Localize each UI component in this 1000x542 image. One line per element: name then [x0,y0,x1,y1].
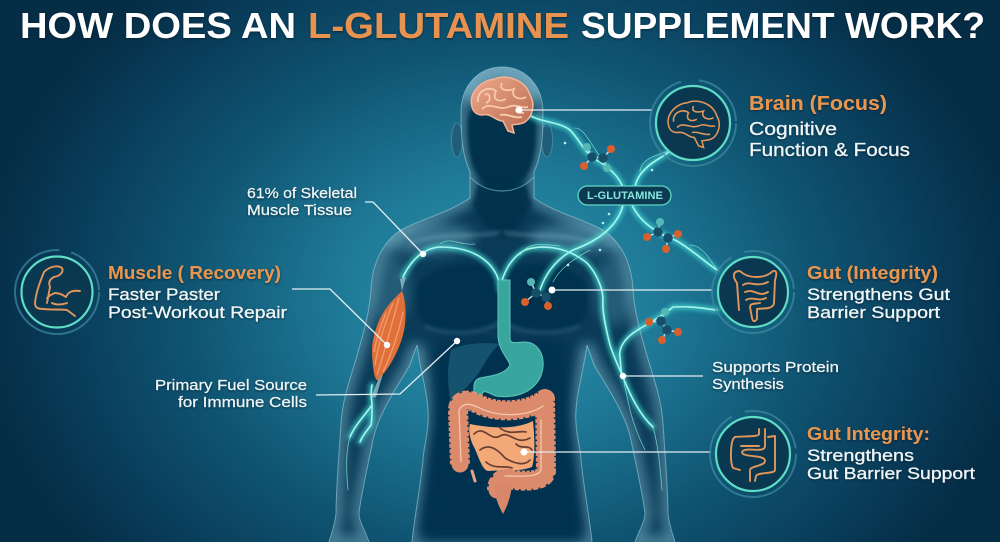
text: gut integrity [807,424,975,483]
brain organ [471,77,533,133]
panel: muscle recovery [15,250,287,334]
text: muscle: Post-Workout Repair [108,303,287,322]
callout: immune fuel: Primary Fuel Source [155,378,307,394]
icon: flexed arm [15,250,99,334]
callout: protein synthesis: Synthesis [712,377,784,393]
glowing neural pathways [347,115,717,490]
panel: gut integrity upper [712,251,950,333]
molecules [521,143,682,344]
text: gut [807,263,950,322]
panel: gut integrity lower [710,411,975,497]
icon: gut [712,251,794,333]
text: gut integrity: Strengthens [807,446,914,465]
leader lines and dots [292,106,712,456]
title [20,5,985,46]
callout: protein synthesis: Supports Protein [712,360,839,376]
text: brain: Cognitive [749,119,837,139]
text: muscle: Faster Paster [108,285,220,304]
text: gut: Barrier Support [807,303,940,322]
icon: brain [650,80,736,166]
head and neck shadow [466,109,538,184]
callout: immune fuel: for Immune Cells [178,395,307,411]
chest and abdomen shadow [416,264,500,332]
title: SUPPLEMENT WORK? [581,5,985,46]
molecule: chest [521,278,552,310]
small intestine [469,421,534,471]
icon: intestine [710,411,796,497]
text: muscle: Muscle ( Recovery) [108,263,281,283]
text: brain: Function & Focus [749,140,910,160]
text: gut: Strengthens Gut [807,285,950,304]
title: HOW DOES AN [20,5,296,46]
muscle organ [371,277,406,398]
molecule: upper left of pill [580,143,615,172]
text: muscle [108,263,287,322]
liver [448,343,500,403]
text: brain [749,93,910,160]
callout: immune fuel [155,378,307,411]
title: L-GLUTAMINE [308,5,569,46]
callout: skeletal muscle [247,186,357,219]
text: gut integrity: Gut Barrier Support [807,464,975,483]
molecule: below pill [643,218,682,253]
text: brain: Brain (Focus) [749,93,887,115]
large intestine [458,399,546,514]
panel: brain focus [650,80,910,166]
L-glutamine pill label [578,186,671,205]
text: gut integrity: Gut Integrity: [807,424,930,444]
text: gut: Gut (Integrity) [807,263,938,283]
callout: skeletal muscle: 61% of Skeletal [247,186,357,202]
callout: skeletal muscle: Muscle Tissue [247,203,352,219]
L-glutamine pill label: L-GLUTAMINE [587,190,663,202]
callout: protein synthesis [712,360,839,393]
molecule: right arm [645,308,682,344]
stomach [474,280,543,397]
human body silhouette [329,56,675,542]
